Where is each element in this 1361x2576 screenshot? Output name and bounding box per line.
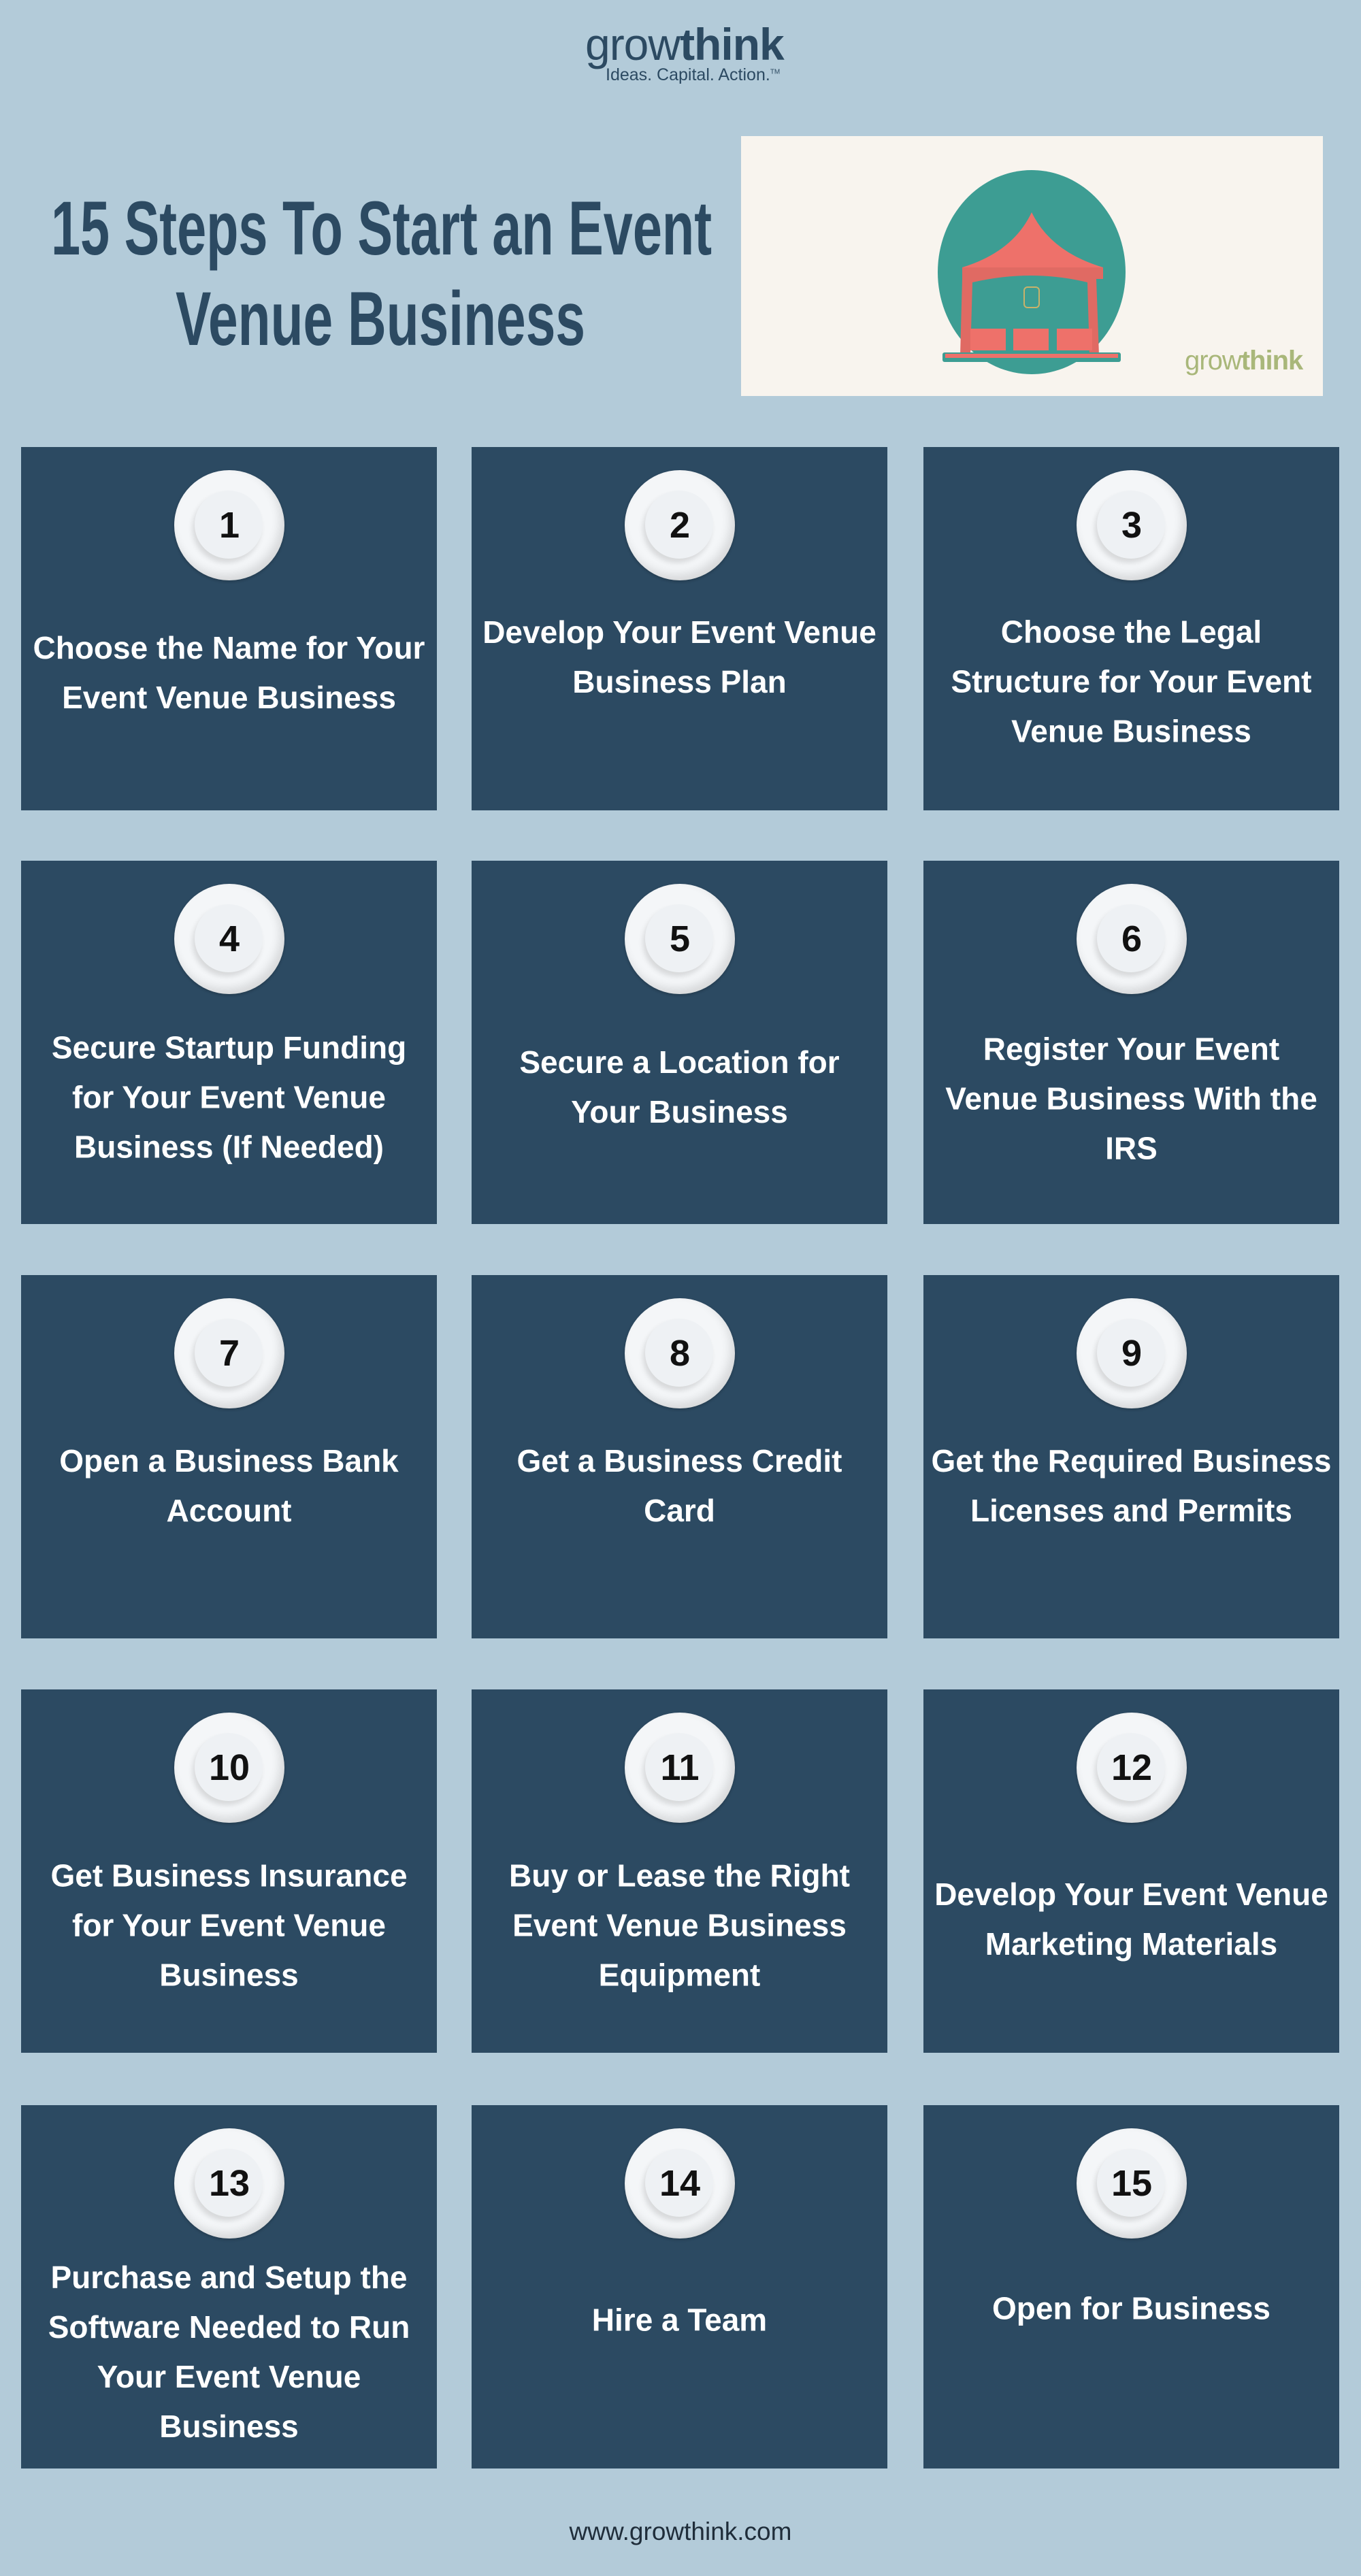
card 6: 6 — [1121, 919, 1142, 959]
card 13: Business — [159, 2409, 299, 2444]
card 4: for Your Event Venue — [72, 1079, 386, 1114]
card 4 — [21, 861, 437, 1224]
card 7: 7 — [219, 1333, 240, 1374]
card 10: Business — [159, 1957, 299, 1992]
card 12: Marketing Materials — [985, 1926, 1277, 1962]
card 11 — [472, 1689, 887, 2053]
card 5: Secure a Location for — [519, 1044, 840, 1080]
icon: tent — [938, 170, 1126, 374]
card 1: Choose the Name for Your — [33, 630, 425, 665]
card 12 — [923, 1689, 1339, 2053]
card 11: Equipment — [599, 1957, 760, 1992]
card 2: Business Plan — [572, 664, 787, 699]
card 11: Buy or Lease the Right — [509, 1857, 850, 1893]
card 6: IRS — [1105, 1131, 1158, 1166]
card 12: 12 — [1111, 1747, 1152, 1788]
card 8 — [472, 1275, 887, 1638]
card 9: Licenses and Permits — [970, 1493, 1292, 1528]
card 15: Open for Business — [992, 2290, 1270, 2326]
card 13 — [21, 2105, 437, 2468]
card 8: Card — [644, 1493, 715, 1528]
card 14: 14 — [659, 2163, 700, 2204]
card 9: 9 — [1121, 1333, 1142, 1374]
card 6: Register Your Event — [983, 1031, 1279, 1067]
card 5: 5 — [670, 919, 690, 959]
card 3: 3 — [1121, 505, 1142, 546]
card 10: Get Business Insurance — [50, 1857, 408, 1893]
card 2 — [472, 447, 887, 810]
card 1: Event Venue Business — [62, 680, 396, 715]
card 13: Software Needed to Run — [48, 2309, 410, 2345]
card 5: Your Business — [571, 1094, 788, 1129]
card 4: Business (If Needed) — [74, 1129, 384, 1165]
card 9: Get the Required Business — [932, 1443, 1331, 1479]
card 7: Account — [166, 1493, 291, 1528]
card 6: Venue Business With the — [945, 1080, 1317, 1116]
card 14 — [472, 2105, 887, 2468]
logo: growthink — [585, 19, 784, 69]
card 14: Hire a Team — [592, 2302, 767, 2338]
card 4: Secure Startup Funding — [52, 1030, 406, 1066]
card 8: Get a Business Credit — [516, 1443, 842, 1479]
card 5 — [472, 861, 887, 1224]
card 13: Your Event Venue — [97, 2359, 361, 2394]
card 13: 13 — [209, 2163, 250, 2204]
card 10: for Your Event Venue — [72, 1908, 386, 1943]
card 3: Structure for Your Event — [951, 664, 1311, 699]
card 9 — [923, 1275, 1339, 1638]
card 4: 4 — [219, 919, 240, 959]
card 1 — [21, 447, 437, 810]
card 10 — [21, 1689, 437, 2053]
card 7 — [21, 1275, 437, 1638]
logo: Ideas. Capital. Action.TM — [606, 65, 780, 84]
card 8: 8 — [670, 1333, 690, 1374]
card 11: Event Venue Business — [512, 1908, 847, 1943]
card 2: 2 — [670, 505, 690, 546]
title — [51, 186, 712, 361]
illustration panel — [741, 136, 1323, 396]
card 2: Develop Your Event Venue — [482, 614, 876, 650]
card 6 — [923, 861, 1339, 1224]
card 10: 10 — [209, 1747, 250, 1788]
card 3 — [923, 447, 1339, 810]
card 15: 15 — [1111, 2163, 1152, 2204]
card 7: Open a Business Bank — [59, 1443, 399, 1479]
card 1: 1 — [219, 505, 240, 546]
logo: small: growthink — [1185, 346, 1304, 376]
card 15 — [923, 2105, 1339, 2468]
footer url: www.growthink.com — [570, 2517, 791, 2545]
card 12: Develop Your Event Venue — [934, 1877, 1328, 1912]
card 13: Purchase and Setup the — [50, 2260, 407, 2295]
card 11: 11 — [660, 1747, 700, 1788]
card 3: Choose the Legal — [1001, 614, 1262, 649]
card 3: Venue Business — [1011, 713, 1251, 748]
